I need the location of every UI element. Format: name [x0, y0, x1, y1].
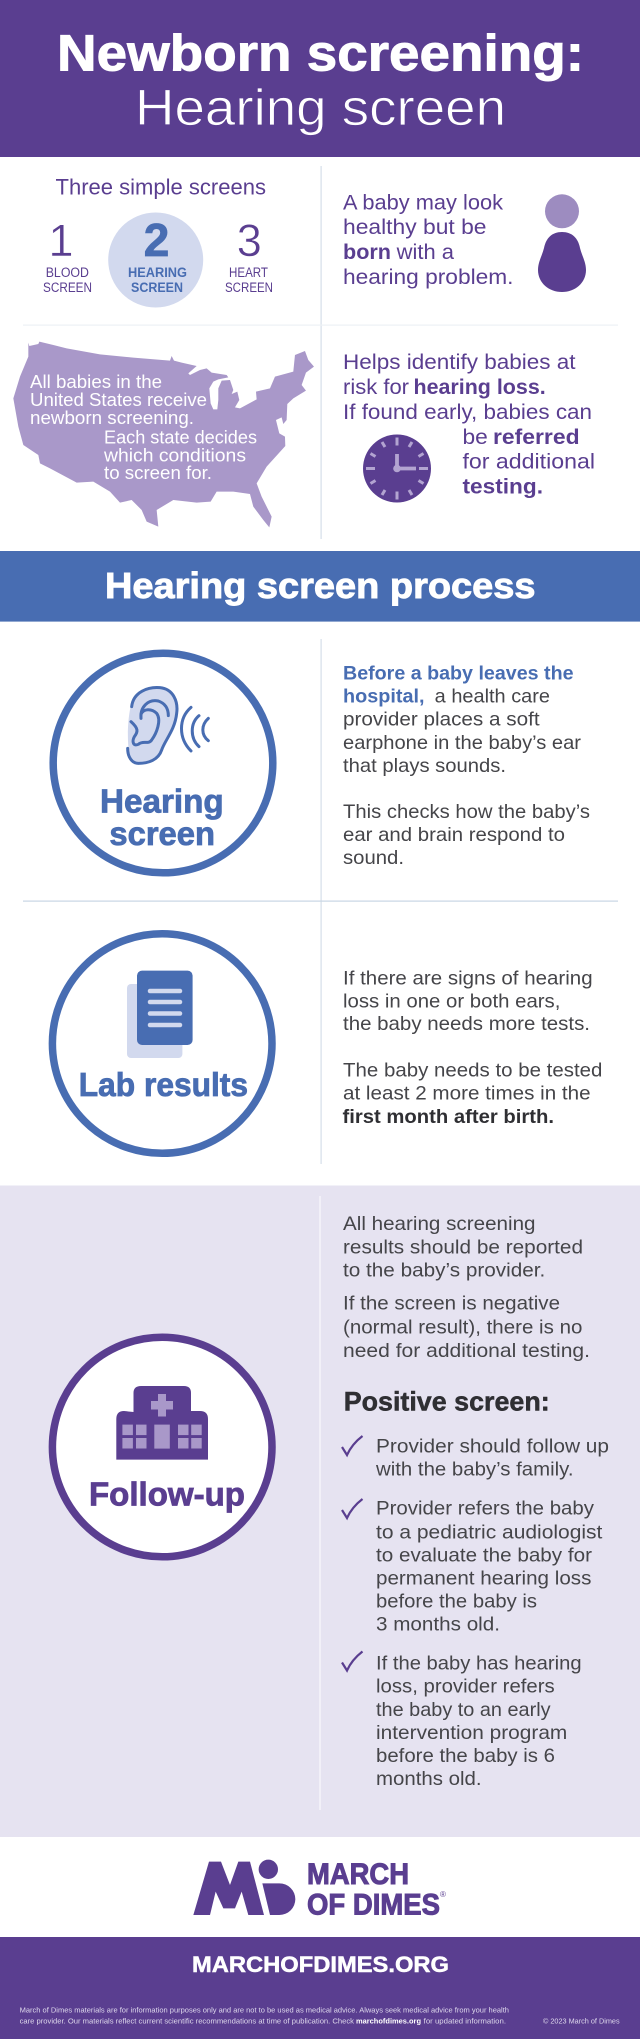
- screen 2: 2: [144, 214, 169, 266]
- text block: signs of hearing loss: the baby needs more tests.: [343, 1013, 590, 1035]
- list item: refer to audiologist: [342, 1498, 603, 1635]
- section heading band: hearing screen process: [0, 551, 640, 622]
- text block: before a baby leaves: Before a baby leaves the: [343, 663, 574, 685]
- screen 2: SCREEN: [131, 280, 183, 295]
- text block: helps identify babies: If found early, babies can: [343, 401, 592, 424]
- screen 2: HEARING: [128, 265, 187, 280]
- text block: results reporting: (normal result), there is no: [343, 1316, 583, 1338]
- footer band: [0, 1937, 640, 2039]
- title line 2: Hearing screen: [135, 79, 506, 136]
- text block: helps identify babies: for additional: [462, 451, 595, 474]
- text block: helps identify babies: [343, 351, 595, 499]
- logo wordmark: OF DIMES: [307, 1888, 440, 1921]
- logo wordmark: ®: [440, 1890, 446, 1899]
- highlight circle behind screen 2: [108, 212, 203, 308]
- heading: three simple screens: Three simple screens: [56, 175, 266, 200]
- text block: signs of hearing loss: If there are signs of hearing: [343, 968, 593, 990]
- disclaimer: care provider. Our materials reflect current scientific recommendations at time of publication. Check: [20, 2016, 354, 2025]
- disclaimer: marchofdimes.org: [356, 2016, 421, 2025]
- icon: baby: [538, 194, 586, 292]
- text block: results reporting: need for additional testing.: [343, 1340, 590, 1362]
- badge circle: [52, 934, 272, 1153]
- panel: lab results step: [52, 934, 272, 1153]
- text block: signs of hearing loss: first month after birth.: [342, 1106, 554, 1128]
- item text: intervention program: [376, 1722, 567, 1744]
- panel: three simple screens: [43, 175, 273, 308]
- heading: positive screen: Positive screen:: [344, 1387, 550, 1417]
- text block: before a baby leaves: that plays sounds.: [343, 755, 506, 777]
- icon: documents: [127, 971, 193, 1058]
- text block: before a baby leaves: hospital,: [343, 685, 424, 707]
- map shape: [13, 342, 314, 527]
- list item: follow up with family: [342, 1435, 609, 1481]
- item text: to evaluate the baby for: [376, 1544, 593, 1566]
- badge label: [100, 783, 224, 852]
- text block: baby may look healthy: born: [343, 241, 391, 264]
- text block: before a baby leaves: sound.: [343, 847, 404, 869]
- disclaimer: for updated information.: [424, 2016, 506, 2025]
- text block: results reporting: If the screen is negative: [343, 1293, 560, 1315]
- text block: before a baby leaves: This checks how the baby’s: [343, 801, 590, 823]
- text block: results reporting: to the baby’s provider.: [343, 1260, 545, 1282]
- text block: before a baby leaves: a health care: [435, 685, 550, 707]
- map text: [30, 371, 257, 483]
- icon: check mark: [342, 1652, 362, 1670]
- text block: before a baby leaves: [343, 663, 590, 869]
- item text: [376, 1498, 603, 1635]
- text block: baby may look healthy: [343, 192, 514, 289]
- icon: ear with sound waves: [128, 687, 208, 763]
- text block: before a baby leaves: ear and brain respond to: [343, 824, 565, 846]
- screen 1: [43, 215, 92, 295]
- text block: results reporting: results should be reported: [343, 1236, 583, 1258]
- text block: helps identify babies: hearing loss.: [414, 376, 546, 399]
- screen 1: 1: [48, 215, 74, 266]
- website: MARCHOFDIMES.ORG: [192, 1952, 449, 1977]
- panel: follow-up step: [52, 1337, 272, 1557]
- text block: baby may look healthy: A baby may look: [343, 192, 504, 215]
- item text: [376, 1653, 582, 1790]
- text block: helps identify babies: be: [462, 426, 488, 449]
- text block: signs of hearing loss: at least 2 more times in the: [343, 1083, 591, 1105]
- copyright: © 2023 March of Dimes: [543, 2016, 620, 2025]
- item text: to a pediatric audiologist: [376, 1521, 603, 1543]
- logo: March of Dimes: [193, 1858, 446, 1921]
- text block: helps identify babies: referred: [493, 426, 580, 449]
- item text: loss, provider refers: [376, 1676, 555, 1698]
- logo wordmark: [307, 1858, 446, 1921]
- text block: baby may look healthy: with a: [396, 241, 454, 264]
- header band with title: [0, 0, 640, 157]
- map text: which conditions: [103, 445, 246, 466]
- text block: results reporting: All hearing screening: [343, 1213, 536, 1235]
- disclaimer: [20, 2006, 509, 2025]
- item text: the baby to an early: [376, 1699, 551, 1721]
- panel: united states map: [13, 342, 314, 527]
- screen 1: SCREEN: [43, 280, 92, 295]
- section heading band: hearing screen process: Hearing screen process: [105, 565, 536, 606]
- text block: helps identify babies: testing.: [462, 476, 543, 499]
- text block: baby may look healthy: healthy but be: [343, 216, 486, 239]
- badge circle: [53, 653, 273, 873]
- text block: baby may look healthy: hearing problem.: [343, 266, 514, 289]
- screen 1: BLOOD: [46, 265, 89, 280]
- list item: early intervention: [342, 1652, 582, 1790]
- text block: signs of hearing loss: The baby needs to be tested: [343, 1059, 602, 1081]
- disclaimer: March of Dimes materials are for information purposes only and are not to be used as medical advice. Always seek medical advice from your health: [20, 2006, 509, 2015]
- map text: All babies in the: [30, 371, 162, 392]
- screen 3: SCREEN: [225, 280, 273, 295]
- item text: months old.: [376, 1768, 482, 1790]
- text block: before a baby leaves: provider places a soft: [343, 709, 540, 731]
- item text: before the baby is 6: [376, 1745, 555, 1767]
- map text: United States receive: [30, 389, 207, 410]
- item text: permanent hearing loss: [376, 1568, 592, 1590]
- item text: 3 months old.: [376, 1613, 500, 1635]
- text block: signs of hearing loss: loss in one or both ears,: [343, 990, 560, 1012]
- icon: hospital: [116, 1386, 208, 1460]
- map text: to screen for.: [104, 462, 212, 483]
- badge circle: [52, 1337, 272, 1557]
- map text: newborn screening.: [30, 407, 194, 428]
- screen 3: 3: [237, 215, 262, 266]
- icon: clock: [363, 434, 431, 502]
- text block: helps identify babies: Helps identify babies at: [343, 351, 576, 374]
- text block: helps identify babies: risk for: [343, 376, 409, 399]
- logo wordmark: MARCH: [307, 1858, 409, 1891]
- map text: Each state decides: [104, 427, 257, 448]
- icon: check mark: [342, 1436, 362, 1455]
- badge label: Follow-up: [89, 1475, 245, 1512]
- text block: results reporting: [343, 1213, 590, 1362]
- item text: with the baby’s family.: [375, 1459, 574, 1481]
- item text: Provider should follow up: [376, 1435, 609, 1457]
- text block: before a baby leaves: earphone in the baby’s ear: [343, 732, 582, 754]
- title line 1: Newborn screening:: [57, 25, 584, 82]
- badge label: Hearing: [100, 783, 224, 820]
- item text: If the baby has hearing: [376, 1653, 582, 1675]
- screen 2: [128, 214, 187, 295]
- badge label: screen: [109, 815, 215, 852]
- badge label: Lab results: [79, 1066, 248, 1103]
- screen 3: [225, 215, 273, 295]
- text block: signs of hearing loss: [342, 968, 602, 1128]
- logo mark: [193, 1860, 295, 1915]
- item text: [375, 1435, 609, 1481]
- panel: hearing screen step: [53, 653, 273, 873]
- item text: Provider refers the baby: [376, 1498, 594, 1520]
- screen 3: HEART: [229, 265, 268, 280]
- panel: follow-up background: [0, 1186, 640, 1837]
- icon: check mark: [342, 1499, 362, 1518]
- item text: before the baby is: [376, 1590, 537, 1612]
